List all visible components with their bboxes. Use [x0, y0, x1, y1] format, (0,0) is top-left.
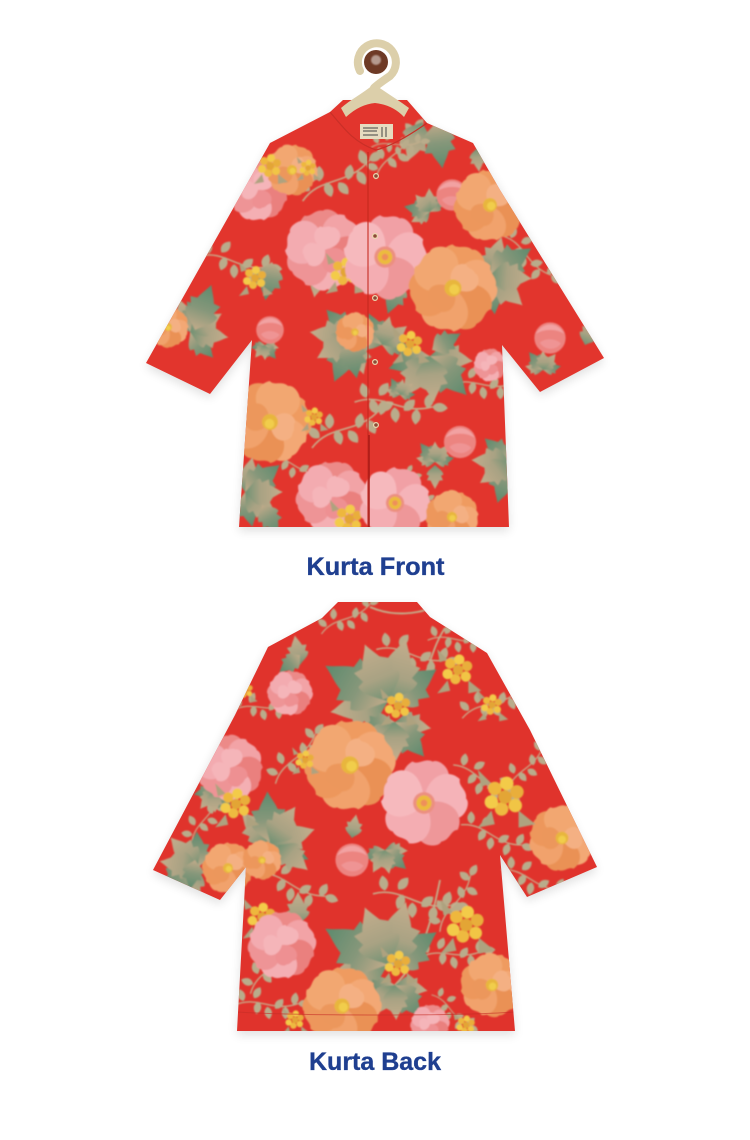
- heading: Kurta Back: Kurta Back: [309, 1048, 441, 1076]
- heading: Kurta Front: Kurta Front: [306, 553, 445, 581]
- label tag: [360, 124, 393, 139]
- buttons: [373, 174, 378, 427]
- kurta back garment: [153, 602, 597, 1031]
- garment shadow front: [146, 104, 604, 531]
- garment shadow back: [153, 606, 597, 1035]
- panel: kurta front photo: [137, 43, 604, 557]
- placket: [367, 152, 369, 527]
- icon: hanger: [341, 43, 409, 117]
- hem stitch: [237, 1012, 515, 1015]
- panel: kurta back photo: [146, 593, 609, 1055]
- kurta front garment: [137, 100, 604, 557]
